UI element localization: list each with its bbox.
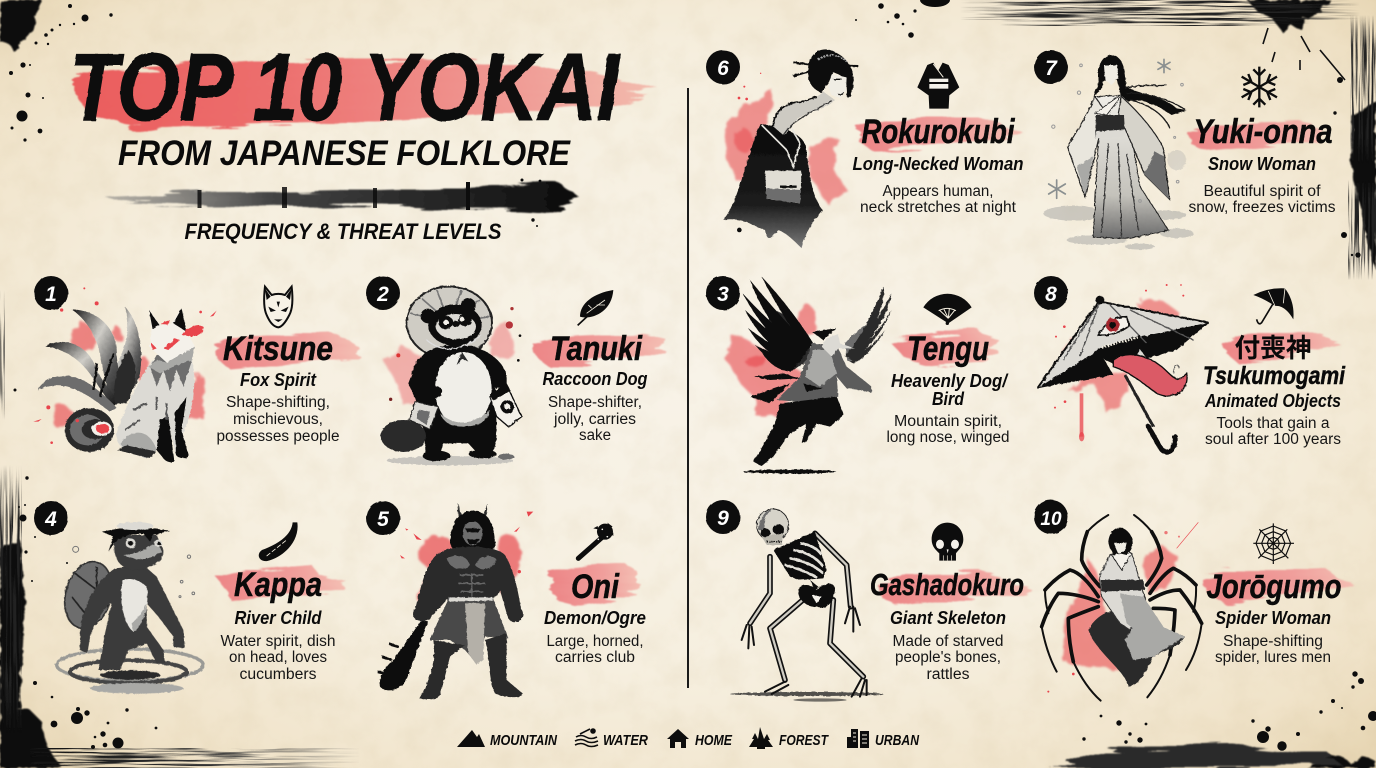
animated umbrella illustration [1037,284,1208,452]
panel: kitsune [33,276,358,462]
description: long nose, winged [886,429,1010,446]
panel: rokurokubi [706,49,1025,248]
label: forest: FOREST [779,733,829,749]
subtitle: Demon/Ogre [544,608,646,628]
description: Tools that gain a [1216,415,1330,432]
panel: kappa [34,501,345,694]
subtitle: Animated Objects [1204,391,1341,411]
number badge 3 [706,276,740,310]
name wash [216,565,345,600]
description: soul after 100 years [1205,431,1341,448]
name: Gashadokuro [870,567,1024,602]
description: snow, freezes victims [1188,199,1336,216]
description: Shape-shifting, [226,394,330,411]
label: urban: URBAN [875,733,919,749]
icon: mountain [457,730,485,747]
kanji name: 付喪神 [1234,333,1312,363]
subtitle: Giant Skeleton [890,608,1006,628]
description: Appears human, [882,183,994,200]
subtitle: Bird [932,389,965,409]
description: on head, loves [229,649,327,666]
label: water: WATER [603,733,648,749]
number badge 5: 5 [377,508,389,531]
number badge 1: 1 [45,283,57,306]
description [216,394,340,445]
description: rattles [926,666,970,683]
club icon [578,523,613,558]
description: Shape-shifter, [548,394,642,411]
subtitle: FROM JAPANESE FOLKLORE [118,134,571,173]
red title brush wash [72,60,658,129]
oni illustration [377,503,533,700]
subtitle [891,371,1009,409]
description: Large, horned, [546,633,644,650]
name: Kitsune [223,330,333,368]
panel: gashadokuro [706,500,1028,702]
description: Made of starved [892,633,1004,650]
leaf icon [578,290,613,325]
description [1215,633,1331,666]
number badge 10: 10 [1040,509,1062,530]
name wash [1202,568,1354,603]
legend [457,727,919,749]
number badge 7: 7 [1045,57,1058,80]
number badge 10 [1034,500,1068,534]
fan icon [923,294,972,325]
number badge 9 [706,500,740,534]
snowflake icon [1242,67,1277,107]
panel: tsukumogami [1034,276,1346,452]
threat scale brush arrow [105,178,578,227]
number badge 3: 3 [717,283,729,306]
umbrella icon [1253,288,1294,324]
spider woman illustration [1042,515,1202,701]
description: Shape-shifting [1223,633,1323,650]
subtitle: Spider Woman [1215,608,1331,628]
description: possesses people [216,428,340,445]
skeleton illustration [730,508,883,702]
description: people's bones, [895,649,1001,666]
description [1205,415,1341,448]
icon: water [575,729,598,746]
description [1188,183,1336,216]
description: mischievous, [233,411,323,428]
subtitle: River Child [234,608,322,628]
number badge 9: 9 [717,507,729,530]
subtitle: Long-Necked Woman [852,154,1024,174]
name: Tanuki [550,330,643,368]
panel: oni [366,501,646,700]
description: Beautiful spirit of [1204,183,1321,200]
subtitle: Heavenly Dog/ [891,371,1009,391]
description: sake [579,427,611,444]
name wash [213,333,358,369]
name wash [550,565,638,606]
subtitle: Raccoon Dog [542,369,648,389]
description [860,183,1017,216]
label: home: HOME [695,733,733,749]
number badge 7 [1034,50,1068,84]
tengu illustration [727,277,892,474]
description [892,633,1004,683]
name wash [532,332,665,367]
name: Tengu [907,330,989,368]
description [548,394,642,444]
name wash [1188,122,1324,152]
name wash [1221,331,1338,365]
label: mountain: MOUNTAIN [490,733,557,749]
cucumber icon [259,522,298,561]
subtitle: Fox Spirit [240,370,317,390]
kimono icon [917,63,959,109]
description: spider, lures men [1215,649,1331,666]
number badge 4 [34,501,68,535]
description: neck stretches at night [860,199,1017,216]
kappa illustration [57,522,203,694]
name: Tsukumogami [1203,362,1346,390]
central divider [687,88,689,688]
main title: TOP 10 YOKAI [69,34,621,141]
number badge 8: 8 [1045,283,1057,306]
name: Kappa [234,566,322,604]
number badge 6 [706,50,740,84]
name: Oni [571,568,620,606]
number badge 2: 2 [376,283,389,306]
panel: tanuki [366,276,665,465]
description: jolly, carries [553,411,636,428]
panel: jorogumo [1034,500,1354,701]
number badge 5 [366,501,400,535]
icon: forest [749,727,773,749]
rokurokubi illustration [723,49,858,248]
name: Yuki-onna [1194,113,1332,151]
description [546,633,644,666]
number badge 6: 6 [717,57,729,80]
scale caption: FREQUENCY & THREAT LEVELS [184,219,502,244]
name: Jorōgumo [1206,568,1342,606]
kitsune illustration [33,287,217,462]
number badge 8 [1034,276,1068,310]
name wash [880,572,1028,605]
title block [69,34,658,244]
description: Mountain spirit, [894,413,1002,430]
panel: tengu [706,276,1010,474]
description: cucumbers [240,666,317,683]
number badge 2 [366,276,400,310]
description [220,633,336,683]
yuki-onna illustration [1043,55,1193,250]
name: Rokurokubi [862,113,1016,151]
icon: urban [847,729,869,748]
skull icon [932,523,963,561]
tanuki illustration [381,287,522,465]
fox mask icon [264,287,292,327]
name wash [858,115,1025,152]
name wash [892,330,997,366]
spider web icon [1253,523,1294,564]
icon: home [667,729,689,748]
description: Water spirit, dish [220,633,336,650]
description [886,413,1010,446]
number badge 4: 4 [44,508,57,531]
description: carries club [555,649,635,666]
subtitle: Snow Woman [1208,154,1316,174]
panel: yuki-onna [1034,50,1336,250]
number badge 1 [34,276,68,310]
